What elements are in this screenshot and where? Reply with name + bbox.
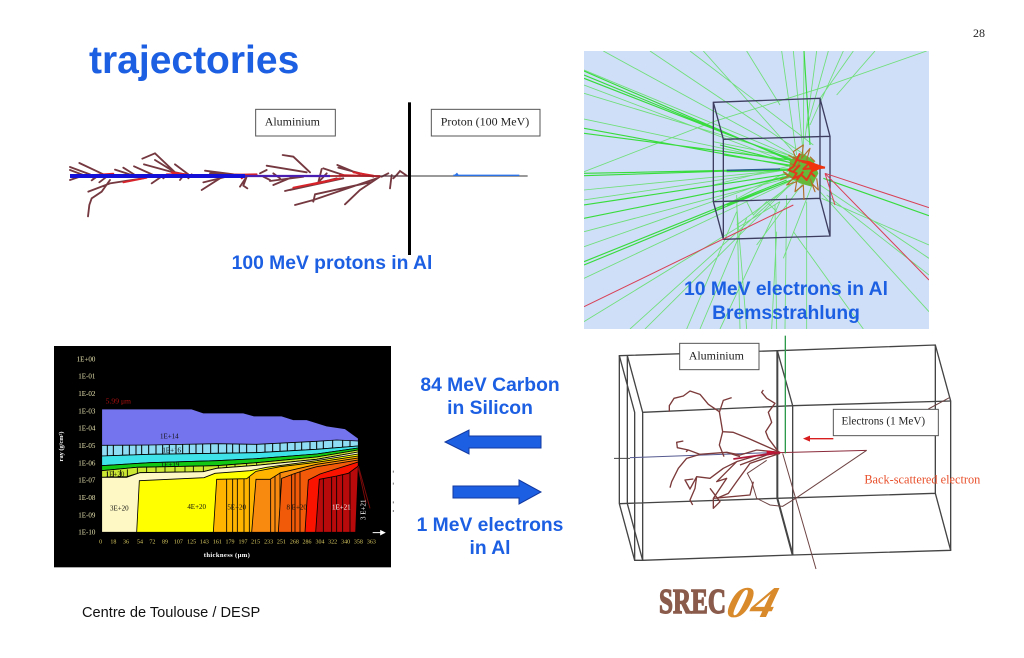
y axis labels: 1E-08 [78, 494, 96, 502]
panel: 84 MeV carbon in silicon chart [54, 346, 393, 567]
y axis title: ray (g/cm²) [58, 431, 65, 461]
label: Proton (100 MeV): Proton (100 MeV) [441, 114, 529, 128]
panel: 10 MeV electrons bremsstrahlung simulation [584, 51, 929, 329]
background [584, 51, 929, 329]
green photon tracks [584, 51, 929, 329]
footer: Centre de Toulouse / DESP [82, 605, 260, 621]
x axis labels: 36 [123, 539, 129, 545]
red area [305, 462, 358, 532]
y axis labels: 1E-07 [78, 477, 96, 485]
label: Aluminium: Aluminium [689, 348, 745, 362]
caption: 1 MeV electrons in Al: in Al [469, 538, 511, 559]
x axis labels: 304 [316, 539, 324, 545]
x axis labels: 363 [367, 539, 376, 545]
cyan band [102, 446, 358, 466]
panel: 100 MeV proton trajectory [70, 102, 540, 255]
y axis labels: 1E-02 [78, 390, 96, 398]
contour labels: 8 E+20 [286, 504, 307, 512]
aluminium block wireframe [614, 345, 951, 560]
caption: 1 MeV electrons in Al: 1 MeV electrons [417, 515, 563, 536]
x axis labels: 54 [137, 539, 143, 545]
x axis labels: 286 [303, 539, 311, 545]
red electron tracks [584, 173, 929, 307]
contour labels: 1E+16 [162, 446, 182, 454]
x axis labels: 233 [264, 539, 273, 545]
contour labels: 5.99 μm [106, 397, 131, 406]
x axis labels: 143 [200, 539, 209, 545]
panel: 1 MeV electron trajectories [614, 336, 980, 569]
contour labels: 1E+20 [106, 470, 125, 478]
electron shower [780, 145, 825, 200]
contour labels: 3 E+21 [359, 499, 367, 520]
beam: transmitted proton track [70, 173, 528, 176]
yellow area [137, 454, 358, 532]
y axis labels: 1E-04 [78, 425, 96, 433]
caption: 100 MeV protons in Al: 100 MeV protons in Al [232, 253, 432, 274]
entry point [767, 450, 783, 456]
cream area [102, 452, 358, 532]
label: Aluminium [256, 109, 335, 136]
logo: SREC 04: 04 [717, 579, 788, 627]
contour labels: 1E+14 [160, 432, 179, 440]
arrow: left [445, 430, 541, 454]
y axis labels: 1E-05 [78, 442, 96, 450]
secondary tracks [70, 153, 407, 216]
orange area [252, 458, 358, 532]
contour labels: 4E+20 [187, 503, 207, 511]
converging contour tail [358, 466, 370, 508]
amber area [213, 456, 358, 532]
x axis labels: 89 [162, 539, 168, 545]
beam axis [630, 452, 780, 458]
label: back-scattered electron: Back-scattered electron [864, 473, 980, 487]
x axis arrow [373, 531, 385, 535]
chart background [54, 346, 391, 567]
y axis labels: 1E-01 [78, 373, 96, 381]
x axis labels: 125 [187, 539, 196, 545]
caption: 84 MeV Carbon in Silicon [420, 375, 560, 419]
title: trajectories [89, 39, 299, 82]
label: Proton (100 MeV) [431, 109, 540, 136]
label: Electrons (1 MeV) [833, 409, 938, 436]
caption: 1 MeV electrons in Al [417, 515, 563, 559]
aluminium cube wireframe [713, 98, 830, 239]
page number: 28 [973, 26, 985, 40]
y axis labels: 1E-03 [78, 407, 96, 415]
label: Aluminium [680, 343, 759, 370]
contour labels: 5E+20 [227, 504, 247, 512]
dark red area [316, 466, 358, 532]
x axis labels: 215 [251, 539, 260, 545]
arrow: incoming electrons [805, 437, 833, 441]
y axis labels: 1E-06 [78, 459, 96, 467]
caption: 84 MeV Carbon in Silicon: 84 MeV Carbon [420, 375, 560, 396]
surface line [408, 102, 411, 255]
contour area chart [102, 409, 358, 532]
x axis labels [99, 539, 376, 545]
green band [102, 448, 358, 471]
x axis labels: 72 [149, 539, 155, 545]
logo: SREC 04: SREC [659, 582, 726, 621]
bright green tracks [584, 51, 929, 265]
y axis labels: 1E+00 [77, 355, 96, 363]
electron trajectories [669, 390, 780, 508]
contour labels: 1E+21 [332, 503, 351, 511]
logo: SREC 04 [659, 579, 788, 627]
x axis labels: 161 [213, 539, 222, 545]
caption: 84 MeV Carbon in Silicon: in Silicon [447, 398, 533, 419]
y axis labels: 1E-10 [78, 529, 96, 537]
x axis labels: 107 [174, 539, 183, 545]
label: Aluminium: Aluminium [265, 114, 321, 128]
x axis labels: 251 [277, 539, 286, 545]
deep orange area [278, 460, 358, 532]
caption: 10 MeV electrons in Al, Bremsstrahlung: 10 MeV electrons in Al [684, 279, 888, 300]
x axis labels: 18 [110, 539, 116, 545]
y axis labels [77, 355, 96, 537]
purple band [102, 409, 358, 447]
x axis title: thickness (µm) [204, 552, 250, 559]
back-scattered tracks [747, 398, 949, 569]
contour labels: 1E+19 [161, 461, 180, 469]
yellow-green hatched band [102, 450, 358, 477]
x axis labels: 268 [290, 539, 299, 545]
x axis labels: 0 [99, 539, 102, 545]
contour labels [106, 397, 367, 520]
label: Electrons (1 MeV): Electrons (1 MeV) [842, 416, 925, 428]
contour labels: 3E+20 [110, 504, 129, 512]
hatched light blue band [102, 440, 358, 456]
vertical green photon [783, 336, 787, 453]
x axis labels: 179 [226, 539, 234, 545]
arrow: right [453, 480, 541, 504]
ticks beyond plot [392, 471, 395, 512]
caption: 10 MeV electrons in Al, Bremsstrahlung [684, 279, 888, 324]
x axis labels: 358 [354, 539, 363, 545]
y axis labels: 1E-09 [78, 511, 96, 519]
x axis labels: 197 [239, 539, 247, 545]
x axis labels: 322 [328, 539, 337, 545]
x axis labels: 340 [341, 539, 350, 545]
caption: 10 MeV electrons in Al, Bremsstrahlung: Bremsstrahlung [712, 303, 860, 324]
